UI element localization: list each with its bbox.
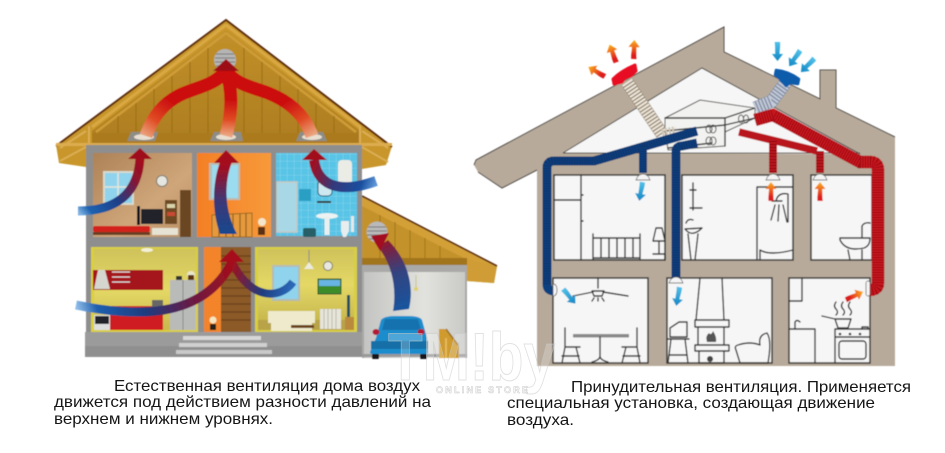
arrow: living room air	[219, 249, 293, 294]
arrows: fresh air intake	[772, 42, 818, 76]
red extract ducts	[739, 115, 878, 290]
fresh air pipe and blue cap	[755, 70, 799, 108]
caption: forced ventilation: воздуха.	[507, 412, 574, 429]
caption: natural ventilation: движется под действием разности давлений на	[54, 394, 431, 411]
arrow: garage air	[371, 233, 411, 311]
arrow: kitchen air	[76, 262, 232, 312]
arrows: exhaust air outside	[586, 40, 640, 81]
panel: natural ventilation house	[56, 20, 497, 359]
arrows: room air flows	[559, 181, 865, 307]
arrow: bathroom air	[302, 149, 376, 187]
arrow: stair hall air	[214, 150, 239, 234]
room: orange stair hall	[197, 153, 271, 237]
caption: natural ventilation: верхнем и нижнем уровнях.	[54, 411, 273, 428]
car	[370, 316, 428, 359]
foundation and steps	[85, 332, 362, 357]
roof and walls silhouette	[474, 27, 895, 366]
exhaust pipe and red cap	[613, 65, 676, 134]
room: study with fireplace	[667, 278, 772, 363]
room: staircase	[204, 247, 251, 332]
room: dining room	[553, 278, 648, 363]
house walls	[86, 145, 362, 357]
icon: ridge vent	[214, 49, 236, 71]
garage roof and attic	[362, 196, 497, 283]
main roof and attic	[56, 20, 392, 169]
room: living room	[255, 247, 357, 332]
room: bathroom with shower	[682, 175, 793, 260]
watermark: TM!by: TM!by	[388, 319, 555, 395]
room: bathroom	[276, 153, 357, 237]
wooden planks in garage	[439, 329, 459, 358]
arrow: bedroom air	[78, 148, 152, 211]
air diffusers	[553, 174, 870, 296]
caption: natural ventilation: Естественная вентиляция дома воздух	[114, 378, 420, 395]
attic space	[563, 68, 860, 154]
icon: garage vent	[366, 222, 388, 242]
room: toilet	[811, 175, 872, 260]
caption: forced ventilation: Принудительная вентиляция. Применяется	[571, 379, 911, 396]
caption: forced ventilation: специальная установка, создающая движение	[507, 395, 875, 412]
icon: attic floor vents	[127, 132, 327, 141]
blue supply ducts	[547, 131, 697, 291]
room: bedroom	[93, 153, 192, 237]
watermark: TM!by: ONLINE STORE	[436, 385, 528, 395]
panel: forced ventilation house	[474, 27, 895, 366]
room: kitchen	[91, 247, 198, 332]
ventilation unit	[665, 100, 755, 150]
garage body	[362, 265, 467, 358]
arrows: warm air through attic	[146, 59, 312, 136]
room: kitchen	[789, 278, 870, 363]
room: bedroom	[554, 175, 665, 260]
